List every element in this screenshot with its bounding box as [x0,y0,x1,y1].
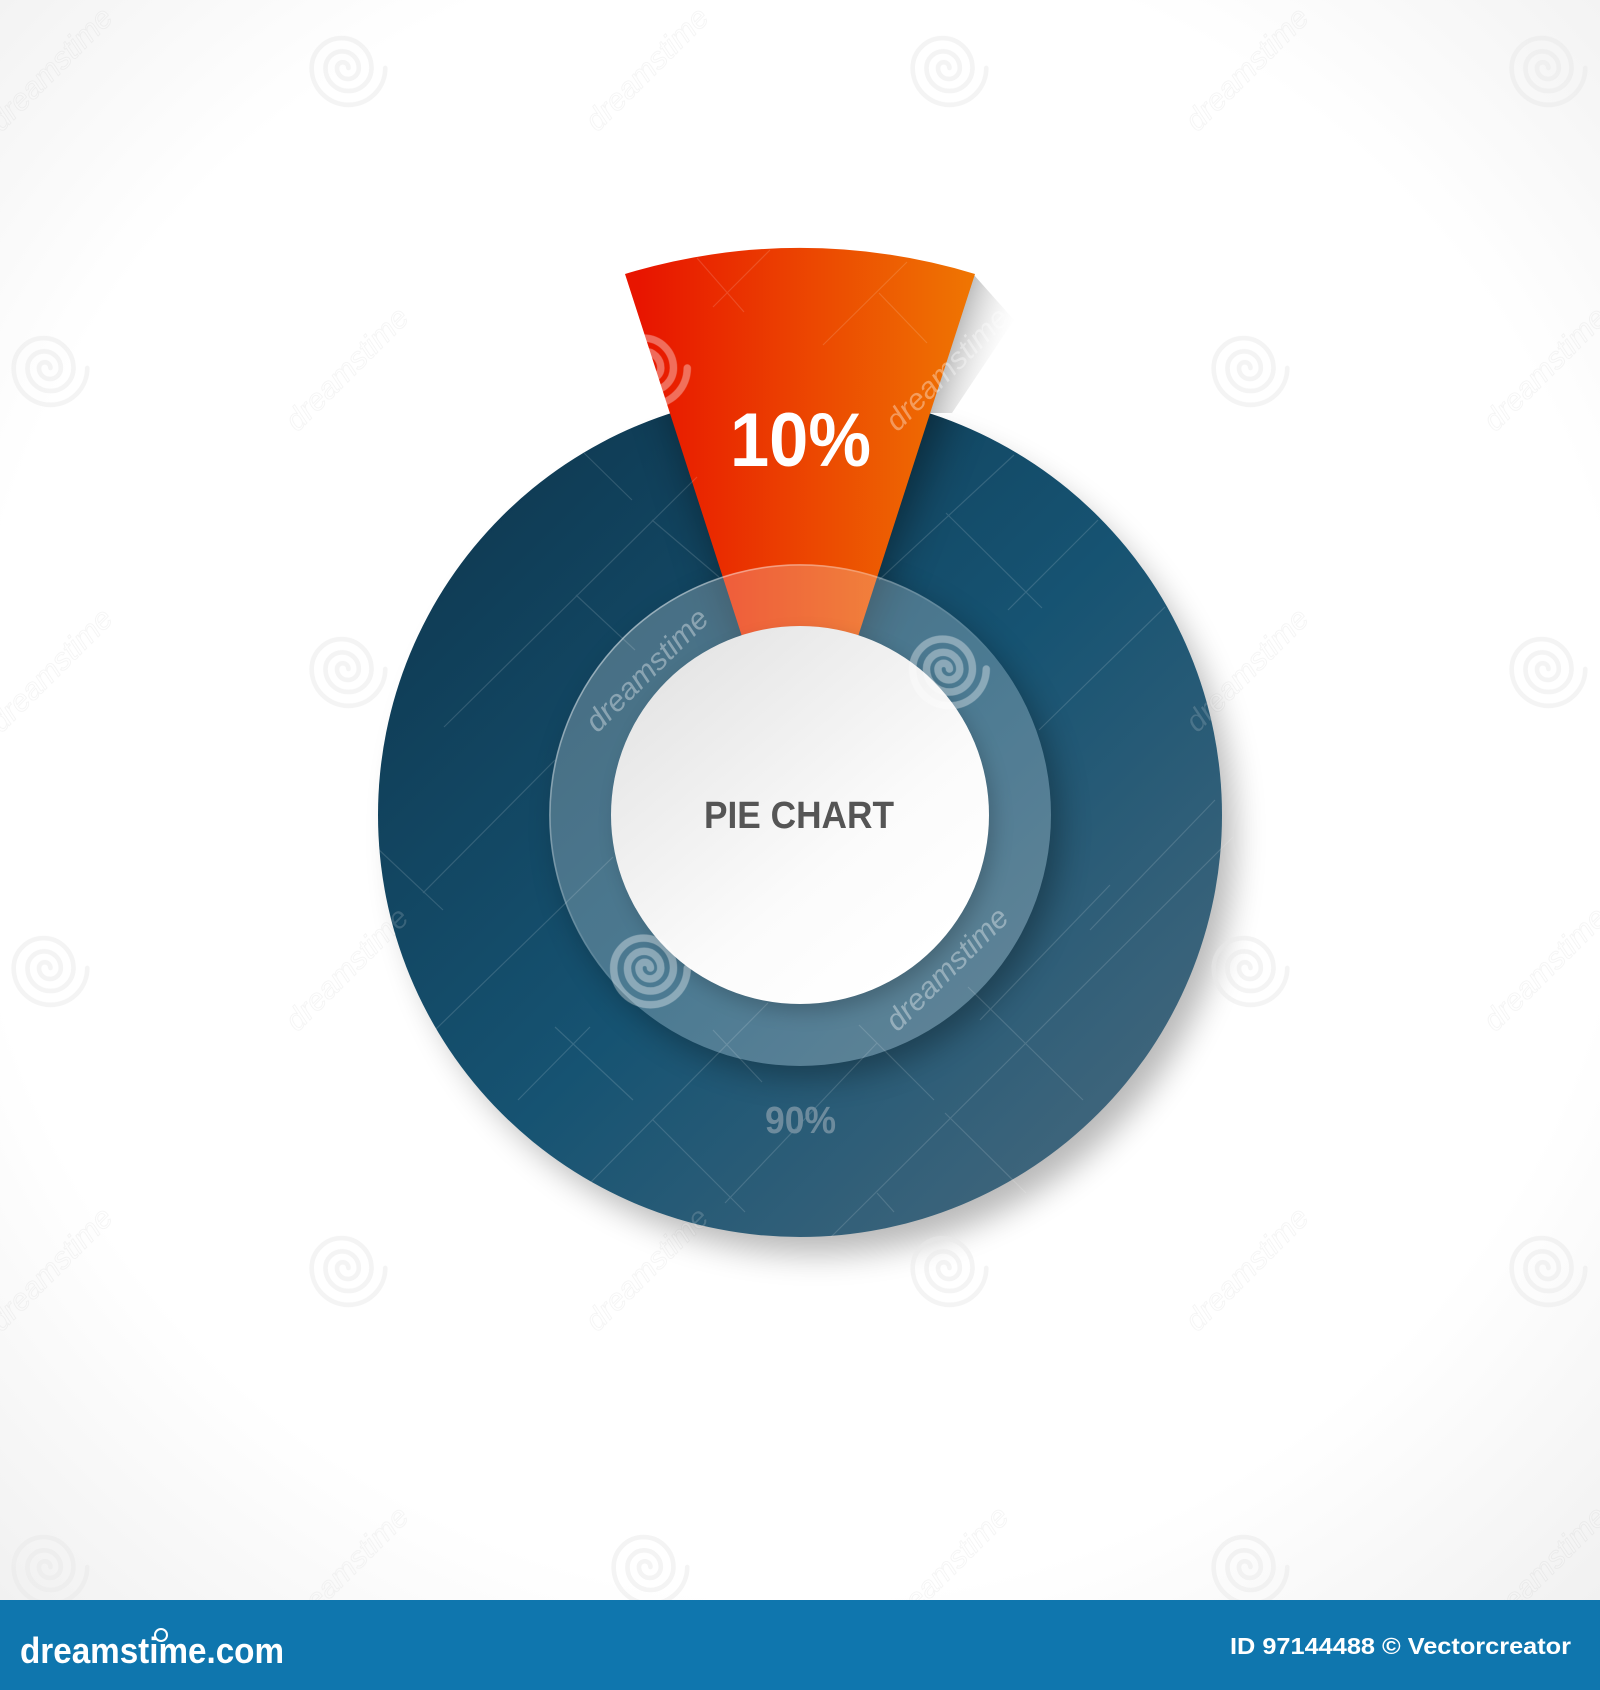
glass ring edge highlight [550,565,1050,1065]
watermark texts: dreamstime [879,901,1016,1038]
watermark texts: dreamstime [279,1500,416,1637]
watermark texts: dreamstime [279,301,416,438]
watermark texts: dreamstime [579,1,716,138]
drop shadow of the donut [398,418,1234,1254]
footer bar [0,1600,1600,1690]
watermark texts: dreamstime [1179,1,1316,138]
watermark texts: dreamstime [579,1201,716,1338]
chart watermark lines [377,250,1233,1237]
watermark texts: dreamstime [579,602,716,739]
watermark texts: dreamstime [879,1500,1016,1637]
translucent glass ring [549,564,1051,1066]
label: 90%: 90% [765,1100,836,1142]
wedge shadow on blue ring [658,414,961,640]
watermark texts: dreamstime [1179,1201,1316,1338]
segment: 90% blue ring [378,393,1222,1237]
segment: 10% orange wedge [625,248,975,644]
label: PIE CHART: PIE CHART [704,795,894,837]
watermark texts: dreamstime [279,901,416,1038]
watermark texts: dreamstime [879,301,1016,438]
footer logo: dreamstime.com [20,1630,284,1671]
centre disc shadow [618,636,994,1012]
centre disc [611,626,989,1004]
shadow of glass ring on blue [560,578,1060,1078]
label: 10%: 10% [730,398,871,483]
watermark texts: dreamstime [1179,602,1316,739]
footer credit: ID 97144488 © Vectorcreator [1230,1633,1571,1659]
wedge cast shadow on background [925,275,1014,413]
